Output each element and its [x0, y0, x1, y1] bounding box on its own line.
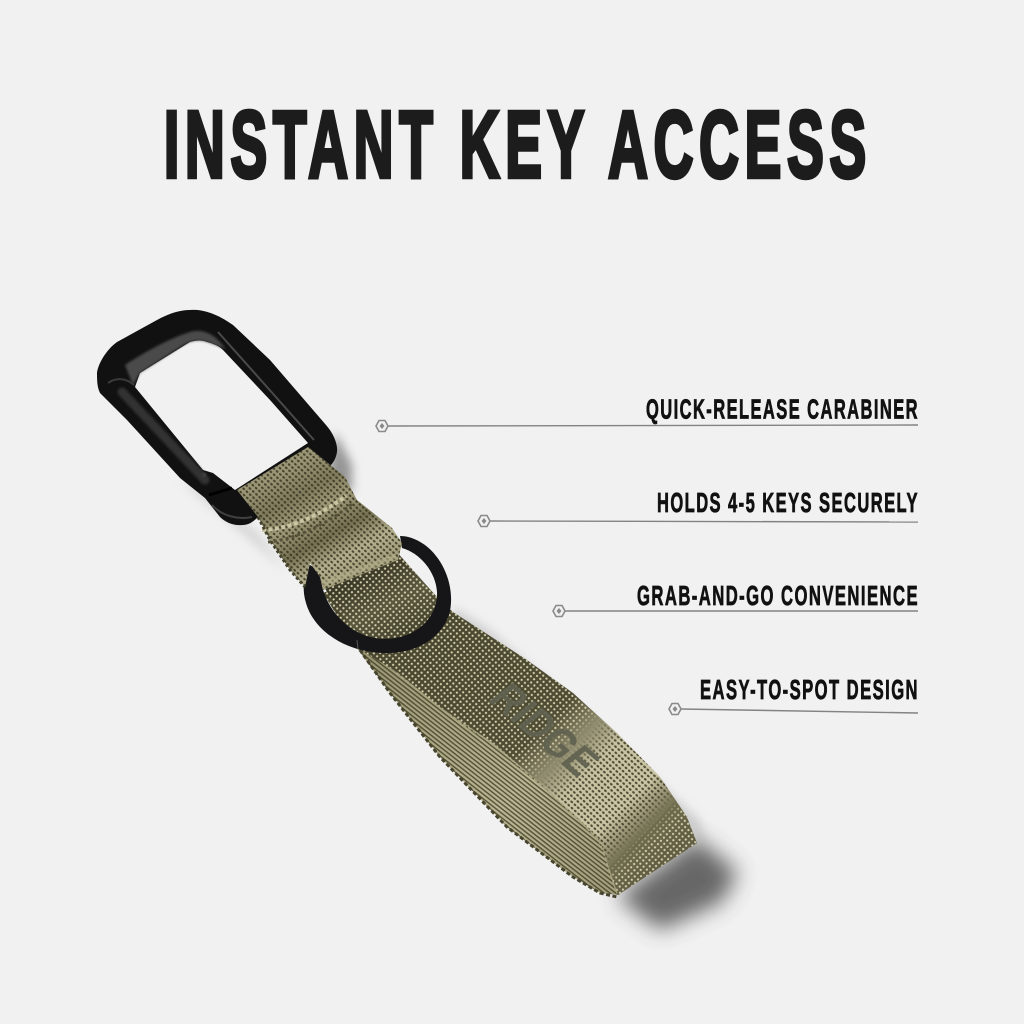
brand mark on strap: RIDGE	[479, 675, 609, 785]
tail seam	[397, 672, 618, 893]
tail front face	[323, 562, 697, 895]
tail back layer weave	[357, 648, 620, 895]
carabiner arm highlight	[218, 332, 314, 440]
tail outer edge	[360, 650, 617, 897]
key ring	[304, 536, 451, 653]
mid strap weave	[318, 550, 437, 638]
upper strap loop	[237, 447, 402, 590]
icon: hex marker	[553, 606, 565, 616]
callout: holds 4-5 keys	[478, 487, 919, 526]
tail back layer	[357, 648, 620, 895]
mid strap section	[318, 550, 437, 638]
upper strap weave	[237, 447, 402, 590]
callout: quick-release carabiner	[376, 394, 919, 432]
callout: grab-and-go	[553, 580, 919, 616]
strap shadows	[180, 432, 738, 930]
strap stitching	[258, 496, 352, 587]
carabiner gate highlight	[122, 392, 205, 480]
strap fold rim	[322, 556, 396, 584]
icon: hex marker	[376, 420, 388, 432]
carabiner inner wall highlight	[125, 331, 226, 385]
carabiner	[97, 310, 337, 525]
tail weave	[323, 562, 697, 895]
icon: hex marker	[669, 704, 681, 714]
icon: hex marker	[478, 516, 490, 526]
product: strap key clip	[97, 310, 738, 930]
callout: easy-to-spot	[669, 674, 919, 714]
